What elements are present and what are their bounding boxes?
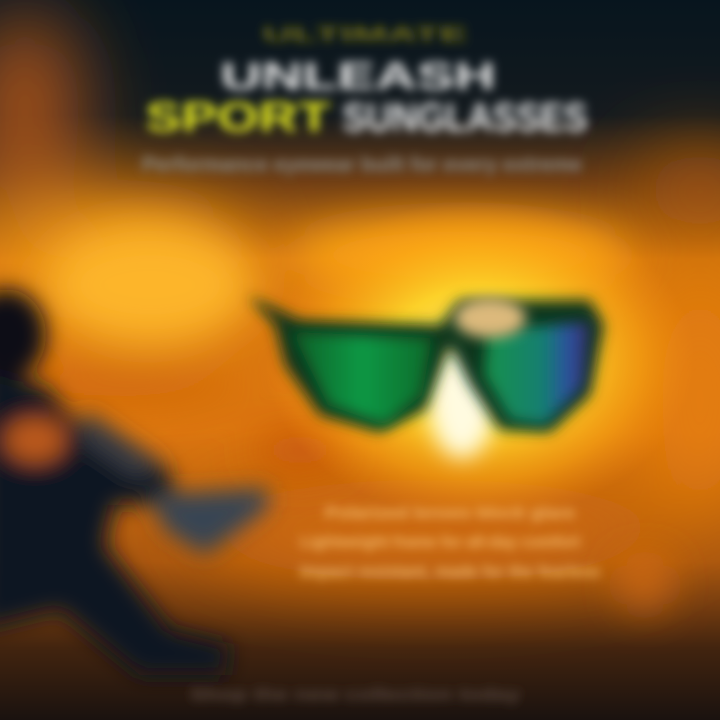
title: UNLEASH — [220, 56, 496, 98]
glasses frame — [248, 296, 604, 432]
glow behind glasses — [265, 200, 695, 520]
left lens — [292, 332, 432, 425]
title — [146, 56, 588, 140]
footer text: Shop the new collection today — [190, 685, 521, 704]
sunglasses — [248, 296, 604, 432]
title: SUNGLASSES — [342, 96, 588, 140]
title: SPORT — [146, 93, 331, 140]
feature text — [300, 505, 600, 581]
lens reflection — [454, 298, 526, 338]
runner silhouette — [0, 289, 268, 675]
subtitle: Performance eyewear built for every extreme — [142, 154, 582, 176]
feature text: Lightweight frame for all-day comfort — [300, 534, 581, 551]
right lens — [484, 322, 590, 425]
feature text: Impact resistant, made for the fearless — [300, 562, 600, 581]
feature text: Polarized lenses block glare — [325, 505, 575, 522]
icon: running shoe — [150, 488, 268, 555]
eyebrow heading: ULTIMATE — [262, 24, 468, 46]
